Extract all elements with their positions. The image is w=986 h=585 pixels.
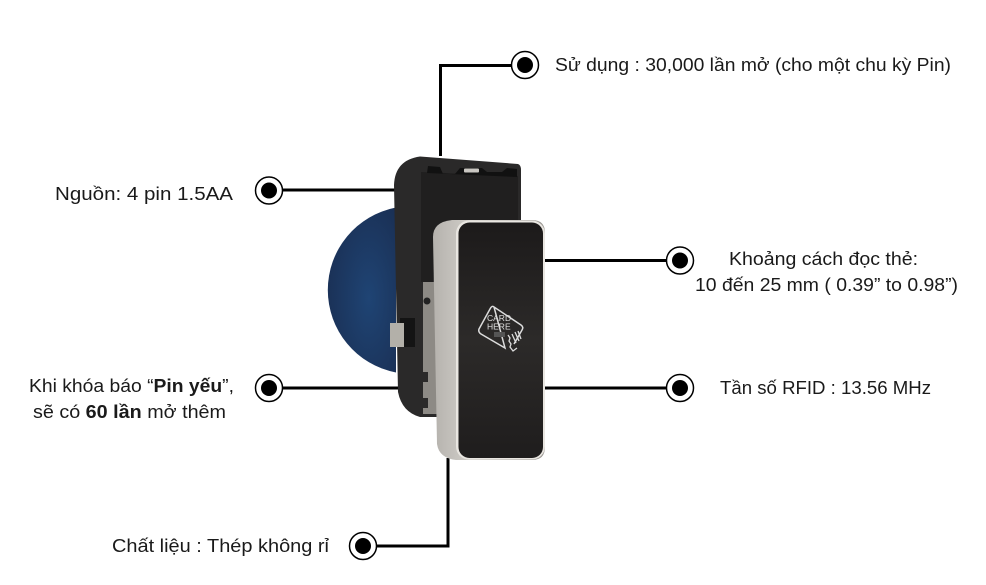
label: read distance <box>695 248 958 295</box>
steel front body <box>433 220 545 460</box>
marker: power <box>256 177 282 204</box>
connector: low battery line <box>283 386 400 390</box>
marker: low battery <box>256 374 282 402</box>
mounting plate <box>423 282 437 414</box>
back housing <box>394 156 521 417</box>
label: read distance: 10 đến 25 mm ( 0.39” to 0.98”) <box>695 274 958 295</box>
label: low battery: Khi khóa báo “ Pin yếu”, <box>29 375 234 396</box>
plate screw <box>424 298 430 304</box>
label: material: Chất liệu : Thép không rỉ <box>112 535 329 556</box>
blue disc behind lock <box>328 208 396 372</box>
connector: power line <box>283 188 396 192</box>
label: read distance: Khoảng cách đọc thẻ: <box>729 248 918 269</box>
marker: read distance <box>666 247 694 274</box>
metal contact <box>464 168 479 172</box>
product: RFID cabinet lock <box>328 156 545 460</box>
top battery clips <box>427 166 517 177</box>
label: frequency: Tần số RFID : 13.56 MHz <box>720 377 931 398</box>
label: usage: Sử dụng : 30,000 lần mở (cho một chu kỳ Pin) <box>555 54 951 75</box>
label: low battery: sẽ có 60 lần mở thêm <box>33 401 226 422</box>
connector: read distance line <box>545 259 667 262</box>
connector: frequency line <box>545 386 667 390</box>
black front face <box>458 222 543 458</box>
marker: usage <box>512 52 538 78</box>
card here logo: CARD <box>487 313 511 323</box>
white edge highlight <box>456 220 545 460</box>
connector: material line <box>377 458 448 546</box>
card here logo: HERE <box>487 322 511 332</box>
marker: frequency <box>666 374 694 402</box>
plate holes <box>423 372 428 408</box>
label: low battery <box>29 375 234 422</box>
connector: usage line <box>440 66 512 156</box>
housing cavity <box>421 172 518 282</box>
marker: material <box>350 532 376 560</box>
latch bolt <box>390 318 415 347</box>
label: power: Nguồn: 4 pin 1.5AA <box>55 183 234 204</box>
card here logo <box>479 306 523 351</box>
